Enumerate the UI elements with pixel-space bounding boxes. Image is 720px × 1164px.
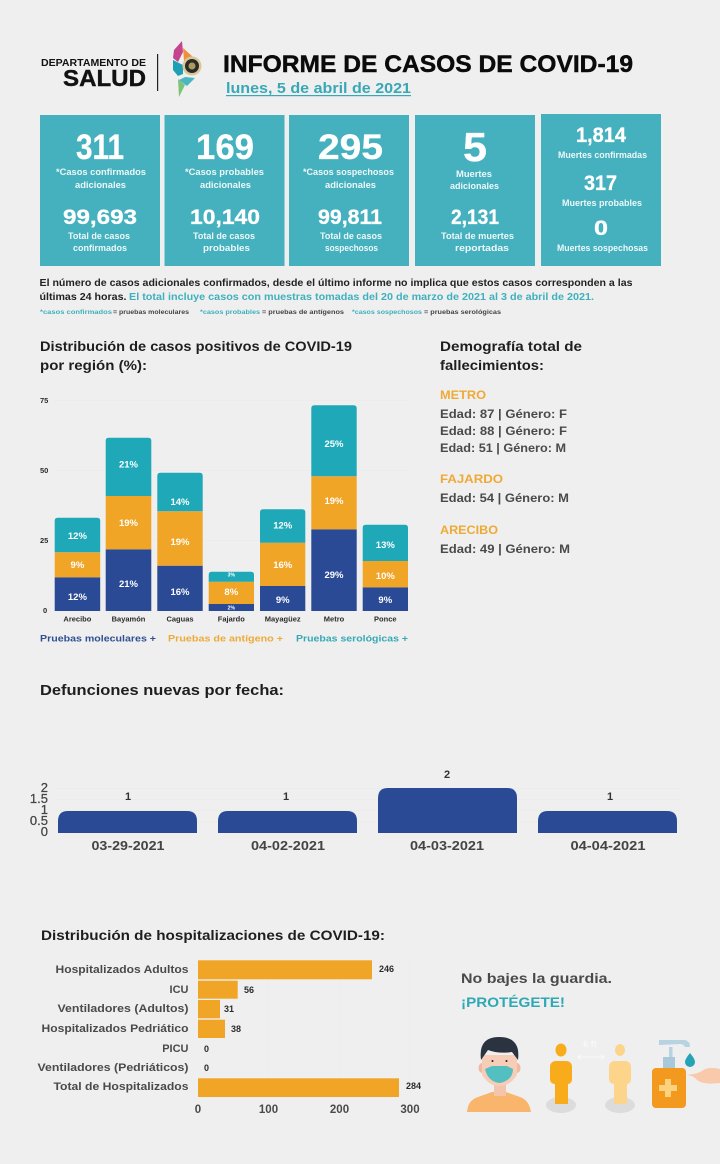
bar: Caguas: 19% [170, 537, 190, 548]
panel: desglose de muertes [541, 114, 661, 266]
horizontal bar chart: hospitalizaciones: 0 [204, 1063, 209, 1073]
panel: casos confirmados: confirmados [73, 243, 127, 254]
date: lunes, 5 de abril de 2021 [226, 80, 411, 97]
bar chart: defunciones por fecha: 03-29-2021 [92, 839, 165, 853]
icon: desinfectante de manos [652, 1040, 720, 1108]
bar chart: defunciones por fecha [30, 769, 680, 853]
panel: demografía de fallecimientos: Edad: 49 | Género: M [440, 542, 570, 556]
panel: demografía de fallecimientos: Edad: 51 | Género: M [440, 441, 566, 455]
icon: distancia de 6 pies [546, 1039, 635, 1113]
chart legend: Pruebas de antígeno + [168, 634, 284, 644]
panel: muertes adicionales: Total de muertes [441, 231, 514, 242]
bar: Mayagüez: 16% [273, 560, 293, 571]
bar: Arecibo: Arecibo [63, 614, 92, 624]
bar: Fajardo: 8% [224, 587, 239, 598]
footnotes: = pruebas de antígenos [262, 309, 344, 316]
panel: desglose de muertes: Muertes confirmadas [558, 150, 647, 161]
bar: Mayagüez: 9% [276, 595, 290, 606]
bar: Caguas [157, 473, 203, 624]
horizontal bar chart: hospitalizaciones: 0 [195, 1104, 201, 1116]
footnotes: *casos confirmados [40, 309, 112, 316]
panel: demografía de fallecimientos: Demografía total de [440, 339, 583, 354]
icon: distancia de 6 pies: 6 ft [583, 1039, 597, 1049]
horizontal bar chart: hospitalizaciones: 31 [224, 1004, 234, 1014]
horizontal bar chart: hospitalizaciones: 300 [400, 1104, 420, 1116]
footnotes: *casos sospechosos [352, 309, 422, 316]
footnotes: *casos probables [200, 309, 260, 316]
bar: Fajardo: 3% [228, 572, 235, 578]
panel: casos confirmados: adicionales [75, 180, 126, 191]
bar: Metro: Metro [324, 614, 345, 624]
bar chart: defunciones por fecha: 1 [607, 791, 613, 803]
panel: casos probables: Total de casos [193, 231, 255, 242]
bar: Fajardo [209, 572, 254, 624]
panel: muertes adicionales: reportadas [455, 243, 509, 254]
stacked bar chart: casos por región: 75 [40, 396, 48, 405]
bar: Ponce: 13% [376, 540, 395, 551]
horizontal bar chart: hospitalizaciones: 0 [204, 1044, 209, 1054]
panel: desglose de muertes: 1,814 [576, 124, 626, 147]
footnotes: = pruebas moleculares [113, 309, 189, 316]
heading: distribución por región: Distribución de casos positivos de COVID-19 [40, 339, 352, 354]
panel: casos confirmados: *Casos confirmados [56, 167, 146, 178]
panel: casos probables: probables [203, 243, 250, 254]
bar: Metro [311, 405, 357, 624]
text block: aclaración: El número de casos adicionales confirmados, desde el último informe no implica que estos casos corresponden a las [40, 277, 633, 289]
bar chart: defunciones por fecha: 2 [444, 769, 450, 781]
panel: casos sospechosos [289, 115, 409, 266]
horizontal bar chart: hospitalizaciones: 56 [244, 985, 254, 995]
logo: Departamento de Salud [41, 41, 202, 97]
panel: desglose de muertes: 0 [594, 217, 608, 240]
logo: Departamento de Salud: DEPARTAMENTO DE [41, 58, 146, 69]
footnotes: = pruebas serológicas [424, 309, 501, 316]
stacked bar chart: casos por región: 50 [40, 466, 48, 475]
panel: demografía de fallecimientos: METRO [440, 388, 486, 402]
panel: casos probables [164, 115, 284, 266]
bar: Mayagüez: Mayagüez [265, 614, 301, 624]
bar: Fajardo: Fajardo [218, 614, 245, 624]
callout: no bajes la guardia: ¡PROTÉGETE! [461, 994, 565, 1010]
bar: Arecibo: 9% [71, 560, 85, 571]
bar chart: defunciones por fecha: 04-04-2021 [570, 839, 646, 853]
bar chart: defunciones por fecha: 04-03-2021 [410, 839, 484, 853]
bar chart: defunciones por fecha: 1 [125, 791, 131, 803]
bar: Mayagüez: 12% [273, 520, 293, 532]
panel: muertes adicionales: 2,131 [451, 206, 499, 229]
panel: casos sospechosos: 295 [318, 128, 383, 167]
panel: demografía de fallecimientos: FAJARDO [440, 472, 503, 486]
text block: aclaración [40, 277, 633, 303]
panel: demografía de fallecimientos: ARECIBO [440, 523, 498, 537]
text block: aclaración: El total incluye casos con muestras tomadas del 20 de marzo de 2021 al 3 de abril de 2021. [129, 291, 594, 303]
bar: Arecibo: 12% [68, 592, 87, 603]
bar chart: defunciones por fecha: 1.5 [30, 791, 48, 806]
panel: casos confirmados: 99,693 [63, 206, 137, 229]
bar: Metro: 19% [324, 496, 344, 507]
bar: Ponce: 9% [378, 595, 393, 606]
bar: Ponce: 10% [376, 571, 395, 582]
panel: casos sospechosos: 99,811 [318, 206, 382, 229]
panel: casos confirmados: 311 [76, 128, 124, 167]
panel: demografía de fallecimientos [440, 339, 583, 556]
bar chart: defunciones por fecha: 04-02-2021 [251, 839, 325, 853]
bar: Bayamón: Bayamón [112, 614, 146, 624]
callout: no bajes la guardia: No bajes la guardia. [461, 970, 612, 986]
stacked bar chart: casos por región: 25 [40, 536, 48, 545]
horizontal bar chart: hospitalizaciones: PICU [162, 1043, 189, 1055]
bar chart: defunciones por fecha: 1 [41, 802, 48, 817]
panel: demografía de fallecimientos: Edad: 87 | Género: F [440, 407, 567, 421]
panel: muertes adicionales: Muertes [456, 169, 492, 180]
panel: muertes adicionales [415, 115, 535, 266]
heading: distribución por región [40, 339, 352, 373]
horizontal bar chart: hospitalizaciones: 200 [330, 1104, 349, 1116]
panel: casos probables: 10,140 [190, 206, 260, 229]
chart legend: Pruebas moleculares + [40, 634, 157, 644]
panel: demografía de fallecimientos: fallecimientos: [440, 358, 544, 373]
panel: casos confirmados [40, 115, 160, 266]
stacked bar chart: casos por región [40, 396, 408, 624]
icon: persona con mascarilla [467, 1037, 531, 1112]
bar: Bayamón [106, 438, 151, 624]
callout: no bajes la guardia [461, 970, 612, 1010]
bar: Metro: 25% [324, 439, 344, 450]
panel: desglose de muertes: Muertes sospechosas [557, 243, 648, 254]
bar: Bayamón: 19% [119, 518, 139, 529]
panel: casos sospechosos: *Casos sospechosos [303, 167, 394, 178]
panel: demografía de fallecimientos: Edad: 54 | Género: M [440, 491, 569, 505]
chart legend [40, 634, 408, 644]
panel: casos probables: 169 [196, 128, 254, 167]
panel: desglose de muertes: 317 [584, 172, 617, 195]
horizontal bar chart: hospitalizaciones: Total de Hospitalizados [54, 1081, 188, 1093]
footnotes [40, 309, 501, 316]
horizontal bar chart: hospitalizaciones: Ventiladores (Pedriáticos) [38, 1062, 189, 1074]
bar: Ponce [363, 525, 408, 624]
horizontal bar chart: hospitalizaciones: Hospitalizados Adultos [56, 964, 188, 976]
bar: Fajardo: 2% [228, 606, 235, 612]
bar chart: defunciones por fecha: 2 [41, 780, 48, 795]
bar chart: defunciones por fecha: 1 [283, 791, 289, 803]
bar: Bayamón: 21% [119, 460, 139, 470]
panel: desglose de muertes: Muertes probables [562, 198, 642, 209]
heading: hospitalizaciones: Distribución de hospitalizaciones de COVID-19: [41, 928, 385, 943]
bar: Arecibo: 12% [68, 531, 87, 542]
heading: defunciones: Defunciones nuevas por fecha: [40, 682, 284, 699]
horizontal bar chart: hospitalizaciones [38, 958, 421, 1116]
horizontal bar chart: hospitalizaciones: Hospitalizados Pedriático [42, 1023, 189, 1035]
panel: casos confirmados: Total de casos [68, 231, 130, 242]
panel: casos sospechosos: Total de casos [320, 231, 382, 242]
horizontal bar chart: hospitalizaciones: ICU [170, 984, 189, 996]
chart legend: Pruebas serológicas + [296, 634, 408, 644]
logo: Departamento de Salud: SALUD [63, 65, 146, 91]
bar: Caguas: Caguas [166, 614, 194, 624]
panel: muertes adicionales: adicionales [450, 181, 499, 192]
bar: Caguas: 16% [170, 587, 190, 598]
heading: distribución por región: por región (%): [40, 358, 147, 373]
horizontal bar chart: hospitalizaciones: Ventiladores (Adultos) [58, 1003, 189, 1015]
bar: Bayamón: 21% [119, 579, 139, 590]
horizontal bar chart: hospitalizaciones: 38 [231, 1024, 241, 1034]
panel: casos sospechosos: sospechosos [325, 243, 378, 254]
panel: demografía de fallecimientos: Edad: 88 | Género: F [440, 424, 567, 438]
panel: casos probables: *Casos probables [185, 167, 264, 178]
stacked bar chart: casos por región: 0 [43, 606, 47, 615]
horizontal bar chart: hospitalizaciones: 246 [379, 964, 394, 974]
bar: Arecibo [55, 518, 100, 624]
title: INFORME DE CASOS DE COVID-19 [223, 51, 633, 78]
horizontal bar chart: hospitalizaciones: 284 [406, 1081, 421, 1091]
bar chart: defunciones por fecha: 0 [41, 824, 48, 839]
text block: aclaración: últimas 24 horas. [40, 291, 127, 303]
panel: casos probables: adicionales [200, 180, 251, 191]
bar: Mayagüez [260, 509, 305, 624]
panel: casos sospechosos: adicionales [325, 180, 376, 191]
bar: Metro: 29% [324, 570, 344, 581]
bar: Caguas: 14% [170, 497, 190, 508]
panel: muertes adicionales: 5 [463, 124, 487, 170]
horizontal bar chart: hospitalizaciones: 100 [259, 1104, 278, 1116]
bar chart: defunciones por fecha: 0.5 [30, 813, 48, 828]
bar: Ponce: Ponce [374, 614, 397, 624]
